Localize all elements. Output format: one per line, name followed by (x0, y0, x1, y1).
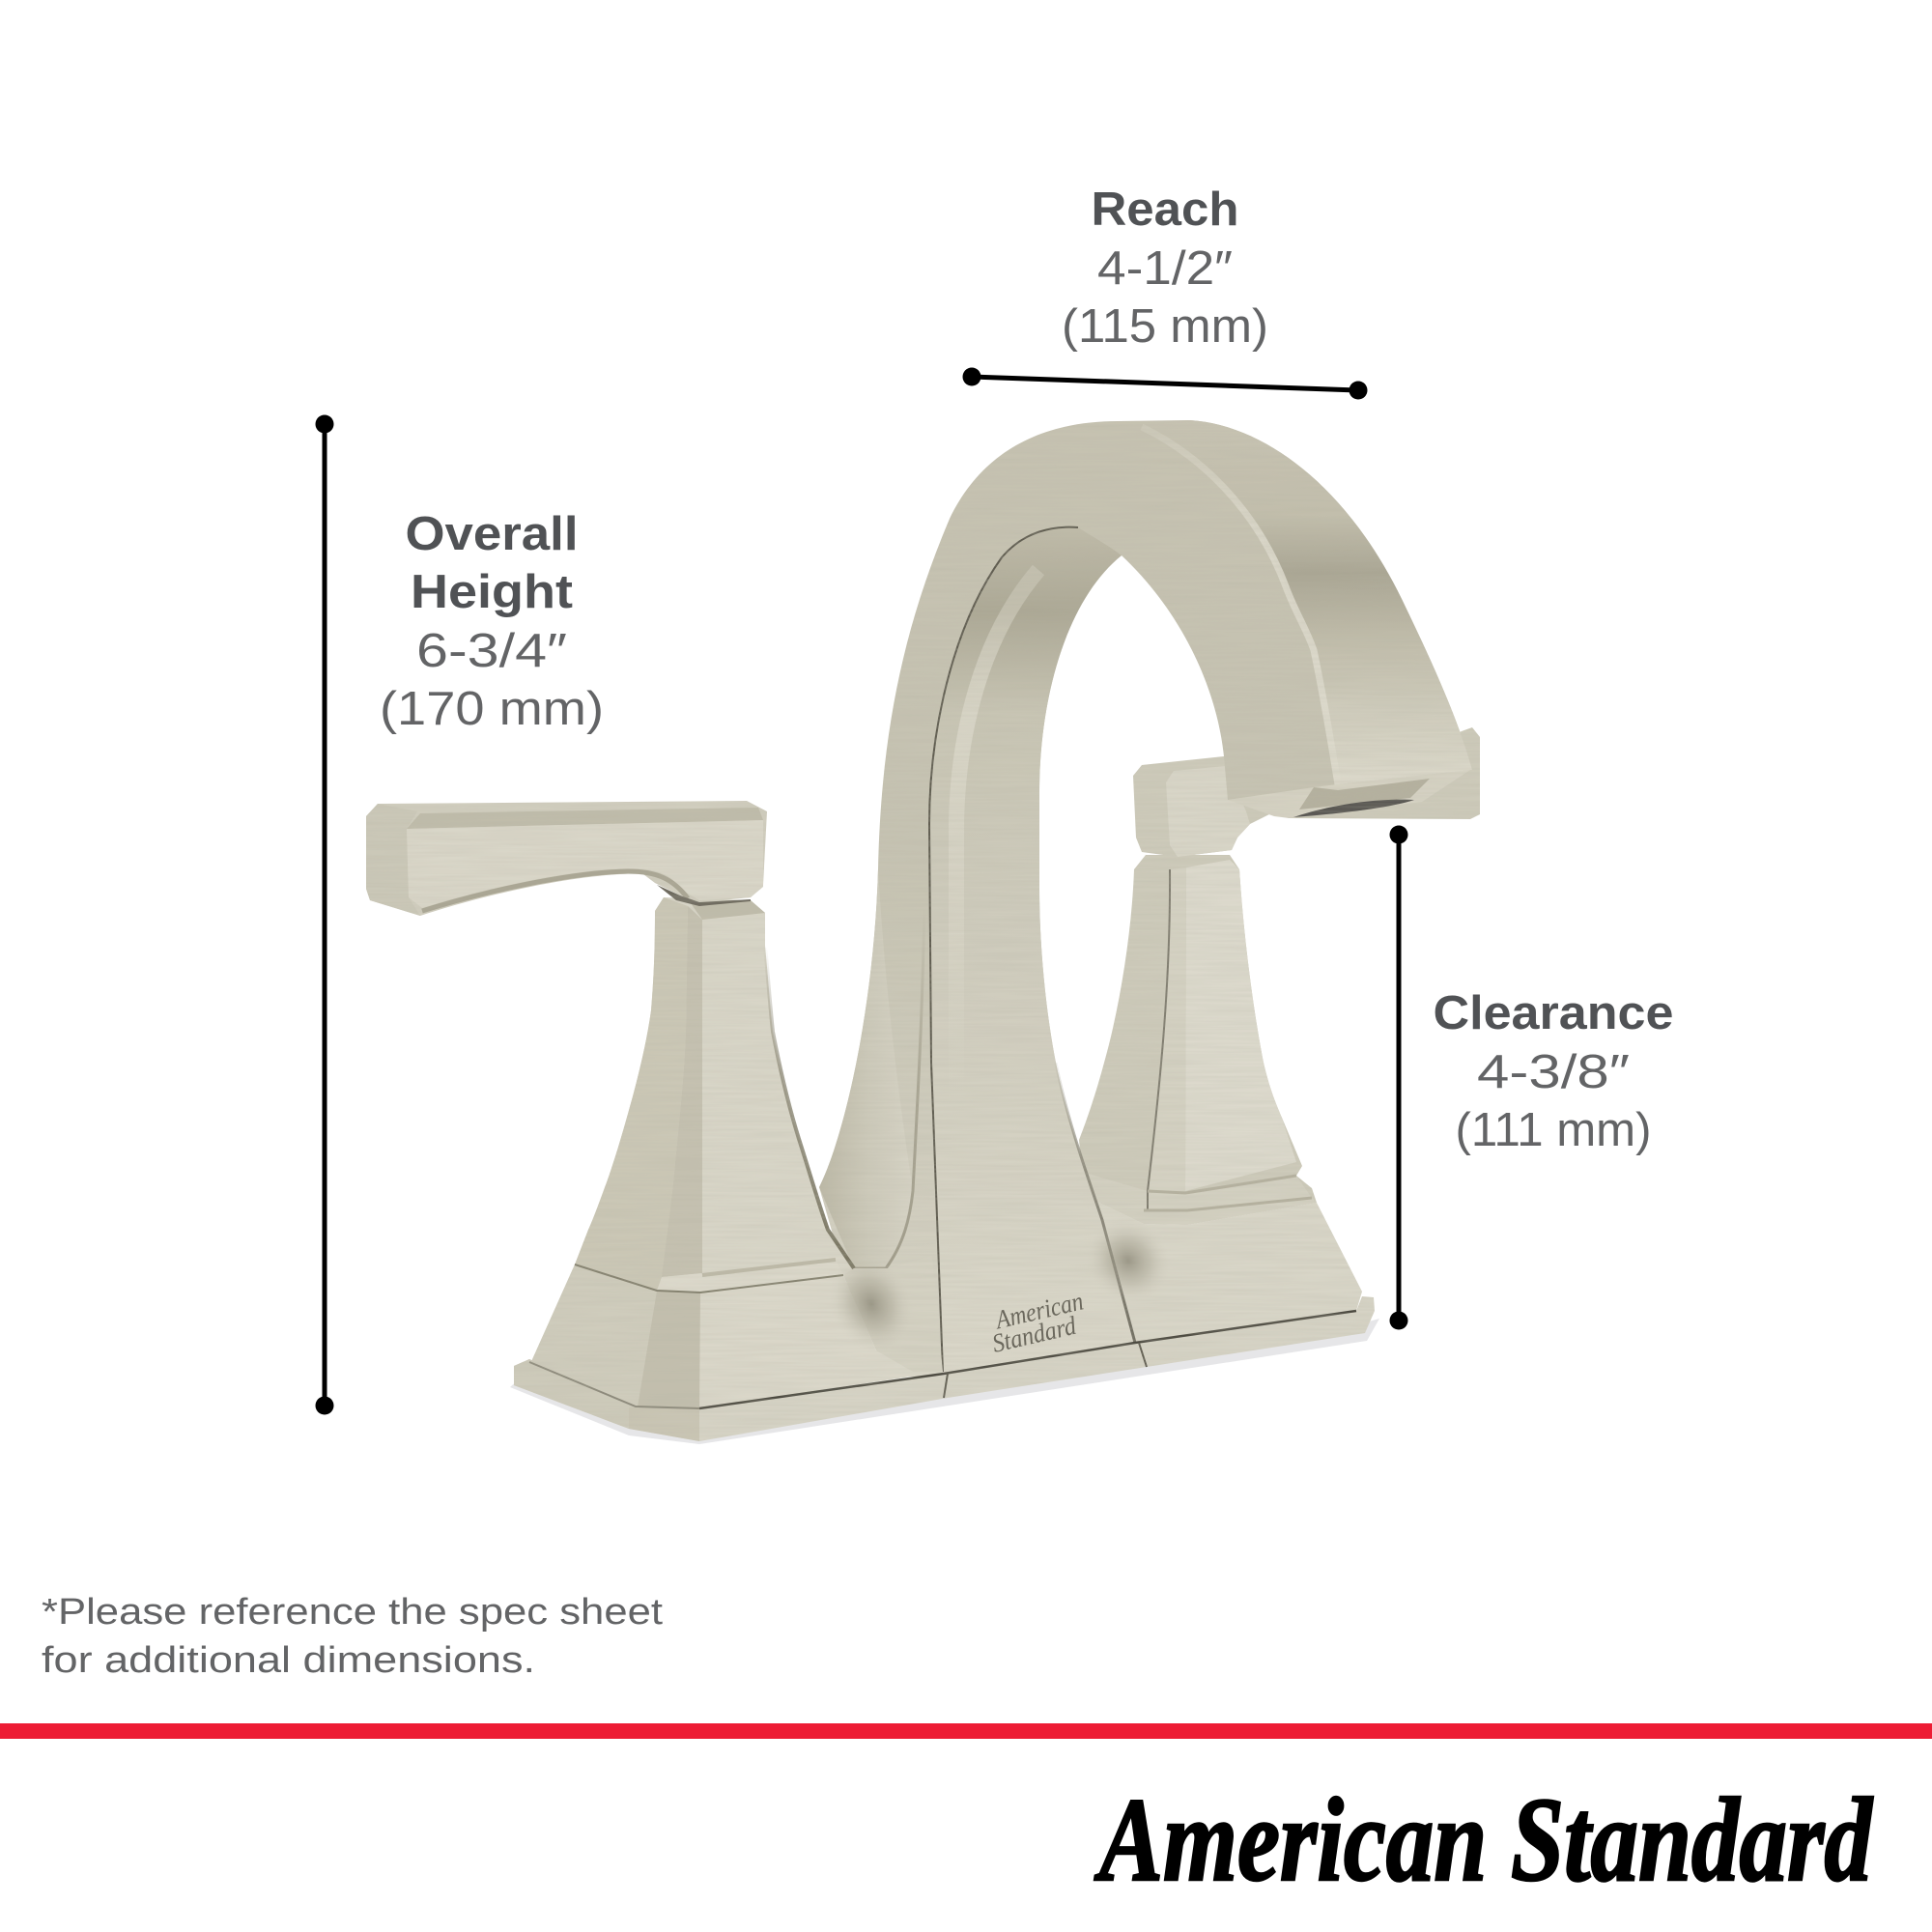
left lever top bevel (407, 808, 763, 829)
left fold dark (813, 1241, 929, 1367)
faucet metal (366, 420, 1480, 1441)
dimension line: overall height (315, 415, 334, 1414)
spout ridge highlight (1142, 427, 1338, 784)
neck fold shading (819, 869, 913, 1268)
dimension line: reach (962, 367, 1368, 400)
left base side facet (529, 1264, 657, 1406)
right column lines (1148, 869, 1170, 1210)
left lever end face (366, 804, 420, 916)
left column top bevel (691, 900, 765, 920)
left column right edge shadow (765, 946, 854, 1268)
left base (529, 1264, 943, 1408)
flange shadow (510, 1319, 1379, 1444)
footnote: for additional dimensions. (42, 1640, 535, 1681)
right column collar (1082, 1172, 1317, 1225)
label: overall height (380, 508, 604, 735)
flange corner facet (629, 1407, 699, 1441)
red divider bar (0, 1723, 1932, 1739)
label: clearance (1434, 987, 1673, 1156)
right column facet (1148, 867, 1186, 1191)
engraved word one: American (991, 1286, 1086, 1335)
left pivot (657, 885, 751, 906)
faucet engraved logo (984, 1286, 1091, 1358)
label: overall height: Height (411, 566, 573, 618)
panel bevel highlight (956, 570, 1038, 1101)
flange seams (944, 1343, 1147, 1398)
flange left line (529, 1362, 699, 1408)
right lever (1133, 727, 1480, 857)
label: reach: (115 mm) (1062, 300, 1268, 353)
left base top line (575, 1264, 843, 1293)
engraved word two: Standard (989, 1311, 1079, 1358)
left lever underside edge (422, 871, 688, 911)
left collar band (702, 1260, 836, 1275)
label: reach: Reach (1092, 184, 1238, 236)
label: clearance: Clearance (1434, 987, 1673, 1039)
left lever body (366, 801, 767, 916)
label: clearance: (111 mm) (1455, 1104, 1652, 1156)
left base mid facet (638, 1291, 700, 1408)
flange top line (699, 1311, 1356, 1408)
footnote (42, 1592, 664, 1681)
spout underside shading (1299, 779, 1430, 810)
label: overall height: 6-3/4″ (416, 625, 567, 677)
panel right edge line (1056, 1063, 1135, 1343)
left column collar (657, 1260, 843, 1293)
footnote: *Please reference the spec sheet (42, 1592, 664, 1633)
right fold shadow (1068, 1201, 1188, 1321)
spout underside (1228, 770, 1470, 818)
spout side face (1142, 420, 1472, 784)
flange side facet (514, 1359, 636, 1429)
label: reach: 4-1/2″ (1097, 242, 1233, 295)
right collar bands (1144, 1176, 1312, 1210)
panel edge line (929, 527, 1078, 1372)
label: reach (1062, 184, 1268, 353)
left column mid facet (662, 906, 702, 1277)
neck fold line (854, 902, 924, 1268)
label: clearance: 4-3/8″ (1477, 1046, 1630, 1098)
left lever front face (407, 820, 763, 908)
dimension line: clearance (1389, 825, 1408, 1329)
label: overall height: (170 mm) (380, 683, 604, 735)
flange (514, 1296, 1375, 1441)
spout and gooseneck body (819, 420, 1472, 1377)
aerator opening (1293, 800, 1414, 817)
left handle column (575, 897, 854, 1293)
label: overall height: Overall (406, 508, 578, 560)
left column side face (575, 897, 688, 1291)
fold redraw on base (843, 1256, 943, 1372)
faucet illustration (366, 420, 1480, 1444)
right base (1082, 1172, 1362, 1343)
right column front face (1185, 860, 1296, 1191)
inner arch panel (929, 527, 1135, 1374)
right lever front face (1166, 766, 1250, 857)
right handle column (1079, 855, 1317, 1225)
